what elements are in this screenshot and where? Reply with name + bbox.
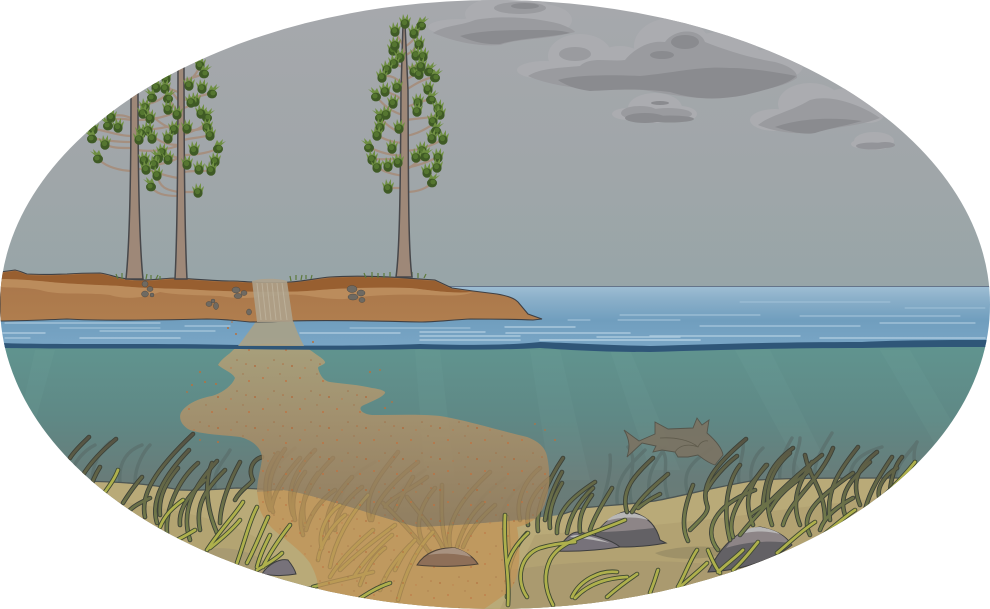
light rays: [15, 350, 980, 480]
tree: pine right: [361, 14, 449, 277]
distant open water: [0, 287, 990, 348]
scattered sediment grains: [186, 321, 556, 443]
cloud: small centre: [612, 93, 697, 123]
sediment plume over water: [180, 344, 549, 527]
shore grass: [116, 272, 426, 281]
rock: small centre-right: [555, 532, 620, 551]
seagrass: foreground: [105, 462, 915, 605]
rock: lower left: [262, 560, 296, 576]
horizon line: [430, 286, 990, 287]
tree: pine middle: [133, 56, 226, 279]
sediment plume crossing the water surface: [238, 320, 304, 346]
cloud: tiny right: [851, 132, 895, 150]
rock: centre, inside plume: [417, 548, 478, 566]
fish: [624, 418, 723, 465]
rock: right: [708, 527, 792, 572]
shoreline land: [0, 270, 542, 322]
seagrass: foreground under the plume: [313, 495, 527, 600]
cloud: right: [750, 88, 884, 134]
sandy lake bed: [91, 477, 902, 609]
sky background: [0, 0, 990, 288]
seagrass: mid-ground: [70, 434, 902, 553]
water surface ripples: [0, 302, 985, 340]
rock cluster: soil stones: [142, 281, 365, 315]
waterline: [0, 340, 990, 352]
sediment outflow at bank: [252, 279, 293, 322]
sediment plume over sand: [257, 490, 535, 609]
tree: pine left: [84, 90, 180, 279]
cloud: large centre: [517, 18, 803, 98]
background seagrass: [73, 432, 919, 504]
underwater column: [0, 346, 990, 609]
cloud: top centre: [428, 0, 575, 45]
rock: large centre-right: [590, 511, 666, 547]
